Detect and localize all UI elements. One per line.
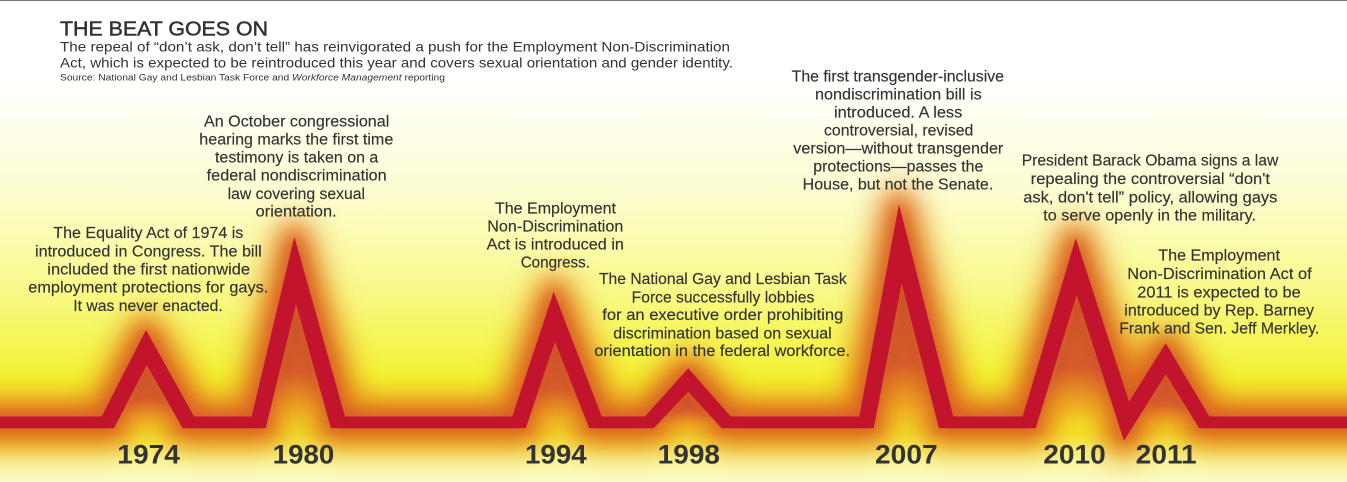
year labels: 1998: [658, 439, 720, 469]
heartbeat glow: [0, 204, 1347, 441]
year labels: 2010: [1043, 439, 1106, 469]
annotation: 1998: [594, 271, 850, 360]
annotation: 1974: It was never enacted.: [73, 298, 223, 315]
source line: Source: National Gay and Lesbian Task Force and Workforce Management reporting: [60, 73, 445, 83]
annotation: 1994: Act is introduced in: [487, 236, 624, 253]
annotation: 1998: discrimination based on sexual: [613, 325, 832, 342]
annotation: 2007: [792, 69, 1004, 194]
intro text: [60, 39, 733, 70]
year labels: 1994: [525, 439, 587, 469]
annotation: 1974: included the first nationwide: [47, 262, 250, 278]
annotation: 1980: An October congressional: [204, 114, 389, 131]
annotation: 2011: The Employment: [1158, 248, 1281, 265]
year labels: [117, 439, 1197, 469]
annotation: 2011: Frank and Sen. Jeff Merkley.: [1119, 321, 1319, 338]
annotation: 2010: ask, don't tell” policy, allowing gays: [1023, 189, 1278, 206]
annotation: 2007: nondiscrimination bill is: [815, 87, 982, 104]
annotation: 1998: for an executive order prohibiting: [602, 307, 843, 324]
annotation: 1980: hearing marks the first time: [199, 132, 393, 148]
annotation: 2011: 2011 is expected to be: [1137, 284, 1301, 301]
annotation: 2007: protections—passes the: [813, 159, 983, 176]
annotation: 1980: orientation.: [256, 204, 337, 221]
annotation: 2007: version—without transgender: [793, 140, 1003, 158]
annotation: 2007: controversial, revised: [824, 123, 973, 140]
annotation: 2010: repealing the controversial “don't: [1031, 171, 1271, 188]
annotation: 2011: [1119, 248, 1319, 338]
annotation: 2010: to serve openly in the military.: [1043, 207, 1256, 224]
annotation: 2007: House, but not the Senate.: [803, 176, 993, 194]
annotation: 1994: The Employment: [495, 200, 617, 217]
annotation: 2010: [1022, 153, 1279, 224]
year labels: 1974: [117, 439, 180, 469]
annotation: 2007: introduced. A less: [834, 104, 963, 122]
annotation: 1994: Non-Discrimination: [487, 218, 623, 235]
annotation: 1980: testimony is taken on a: [215, 150, 379, 167]
annotation: 1998: orientation in the federal workforce.: [594, 343, 850, 360]
annotation: 1974: employment protections for gays.: [28, 280, 268, 297]
intro text: The repeal of “don’t ask, don’t tell” has reinvigorated a push for the Employment Non-Discrimination: [60, 39, 730, 55]
annotation: 1994: Congress.: [521, 254, 590, 271]
header block: [60, 18, 733, 83]
annotation: 1998: Force successfully lobbies: [632, 289, 815, 306]
annotation: 1974: The Equality Act of 1974 is: [53, 225, 244, 242]
annotation: 1980: federal nondiscrimination: [207, 168, 387, 184]
annotation: 1980: [199, 114, 393, 221]
year labels: 2007: [875, 439, 938, 469]
title: THE BEAT GOES ON: [60, 18, 268, 41]
annotation: 1980: law covering sexual: [228, 186, 365, 203]
annotation: 1974: [28, 225, 268, 315]
annotation: 2010: President Barack Obama signs a law: [1022, 153, 1279, 170]
annotation: 2011: Non-Discrimination Act of: [1127, 266, 1312, 283]
annotation: 1994: [487, 200, 624, 271]
year labels: 2011: [1136, 439, 1197, 469]
year labels: 1980: [273, 439, 334, 469]
annotation: 2007: The first transgender-inclusive: [792, 69, 1004, 86]
annotation: 1998: The National Gay and Lesbian Task: [599, 271, 847, 288]
heartbeat line: [0, 204, 1347, 441]
annotation: 2011: introduced by Rep. Barney: [1124, 303, 1314, 320]
intro text: Act, which is expected to be reintroduced this year and covers sexual orientation and gender identity.: [60, 54, 733, 70]
annotation: 1974: introduced in Congress. The bill: [35, 244, 262, 260]
